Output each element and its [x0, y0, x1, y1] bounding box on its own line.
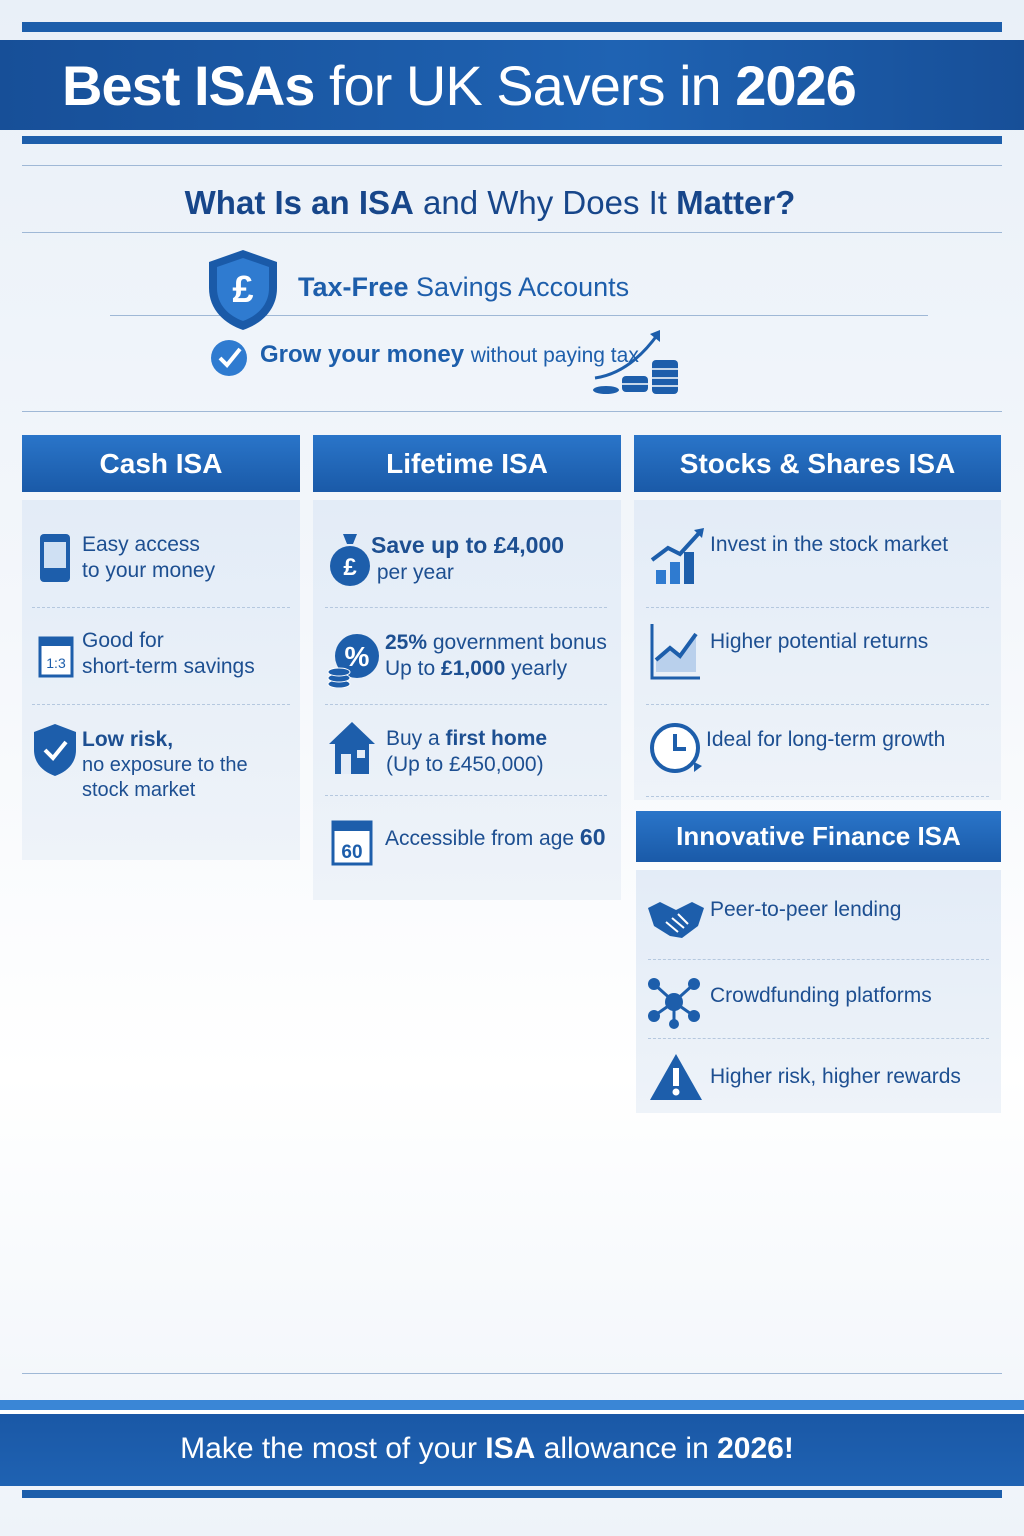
item: p2p: Peer-to-peer lending: [710, 898, 901, 921]
item: first home: [386, 727, 547, 776]
icon: calendar: [38, 636, 74, 678]
column header: Lifetime ISA: [313, 435, 621, 492]
item: save up to: per year: [377, 561, 454, 584]
column header: Lifetime ISA: Lifetime ISA: [386, 448, 548, 479]
icon: shield pound: [209, 250, 277, 330]
item: first home: (Up to £450,000): [386, 753, 544, 776]
item: short-term: Good for: [82, 629, 164, 652]
item: low risk: [82, 728, 248, 801]
icon: calendar: 1:3: [46, 655, 66, 671]
column header: Innovative Finance ISA: Innovative Finance ISA: [676, 821, 961, 851]
item: bonus: Up to £1,000 yearly: [385, 657, 567, 680]
icon: coins arrow: [593, 330, 678, 394]
item: save up to: [371, 532, 564, 584]
item: bonus: 25% government bonus: [385, 631, 607, 654]
footer banner: [0, 1400, 1024, 1486]
item: low risk: stock market: [82, 779, 195, 801]
icon: shield check: [34, 724, 76, 776]
icon: handshake: [648, 902, 704, 938]
icon: phone: [40, 534, 70, 582]
grow text: Grow your money without paying tax: [260, 341, 639, 368]
footer text: Make the most of your ISA allowance in 2026!: [180, 1432, 794, 1465]
item: long-term: Ideal for long-term growth: [706, 728, 945, 751]
title: Best ISAs for UK Savers in 2026: [62, 54, 856, 117]
item: low risk: no exposure to the: [82, 754, 248, 776]
panel: Innovative Finance: [636, 870, 1001, 1113]
column header: Innovative Finance ISA: [636, 811, 1001, 862]
item: low risk: Low risk,: [82, 728, 173, 751]
item: first home: Buy a first home: [386, 727, 547, 750]
item: easy access: to your money: [82, 559, 215, 582]
title banner: [0, 40, 1024, 130]
column header: Stocks & Shares ISA: Stocks & Shares ISA: [680, 448, 955, 479]
panel: Stocks & Shares: [634, 500, 1001, 800]
tax-free text: Tax-Free Savings Accounts: [298, 272, 629, 302]
panel: Lifetime ISA: [313, 500, 621, 900]
item: invest: Invest in the stock market: [710, 533, 948, 556]
icon: percent coins: %: [345, 641, 370, 672]
item: higher risk: Higher risk, higher rewards: [710, 1065, 961, 1088]
icon: calendar 60: 60: [341, 842, 363, 863]
icon: shield pound: £: [232, 269, 254, 311]
icon: warning: [650, 1054, 702, 1100]
item: higher returns: Higher potential returns: [710, 630, 928, 653]
header stripe top: [22, 22, 1002, 32]
icon: money bag: £: [343, 554, 357, 581]
item: easy access: Easy access: [82, 533, 200, 556]
item: save up to: Save up to £4,000: [371, 532, 564, 558]
item: age 60: Accessible from age 60: [385, 824, 606, 850]
icon: network: [648, 978, 700, 1029]
icon: calendar 60: [332, 820, 372, 866]
icon: money bag: [330, 534, 370, 586]
column header: Cash ISA: [22, 435, 300, 492]
item: easy access: [82, 533, 215, 582]
item: crowdfunding: Crowdfunding platforms: [710, 984, 932, 1007]
column header: Cash ISA: Cash ISA: [100, 448, 222, 479]
panel: Cash ISA: [22, 500, 300, 860]
item: bonus: [385, 631, 607, 680]
icon: house: [329, 722, 375, 774]
section heading: What Is an ISA and Why Does It Matter?: [185, 184, 795, 221]
icon: percent coins: [328, 634, 379, 688]
icon: line chart: [650, 624, 700, 680]
item: short-term: short-term savings: [82, 655, 255, 678]
icon: check: [211, 340, 247, 376]
item: short-term: [82, 629, 255, 678]
icon: bar chart: [650, 528, 704, 584]
icon: clock: [650, 723, 702, 773]
column header: Stocks & Shares ISA: [634, 435, 1001, 492]
